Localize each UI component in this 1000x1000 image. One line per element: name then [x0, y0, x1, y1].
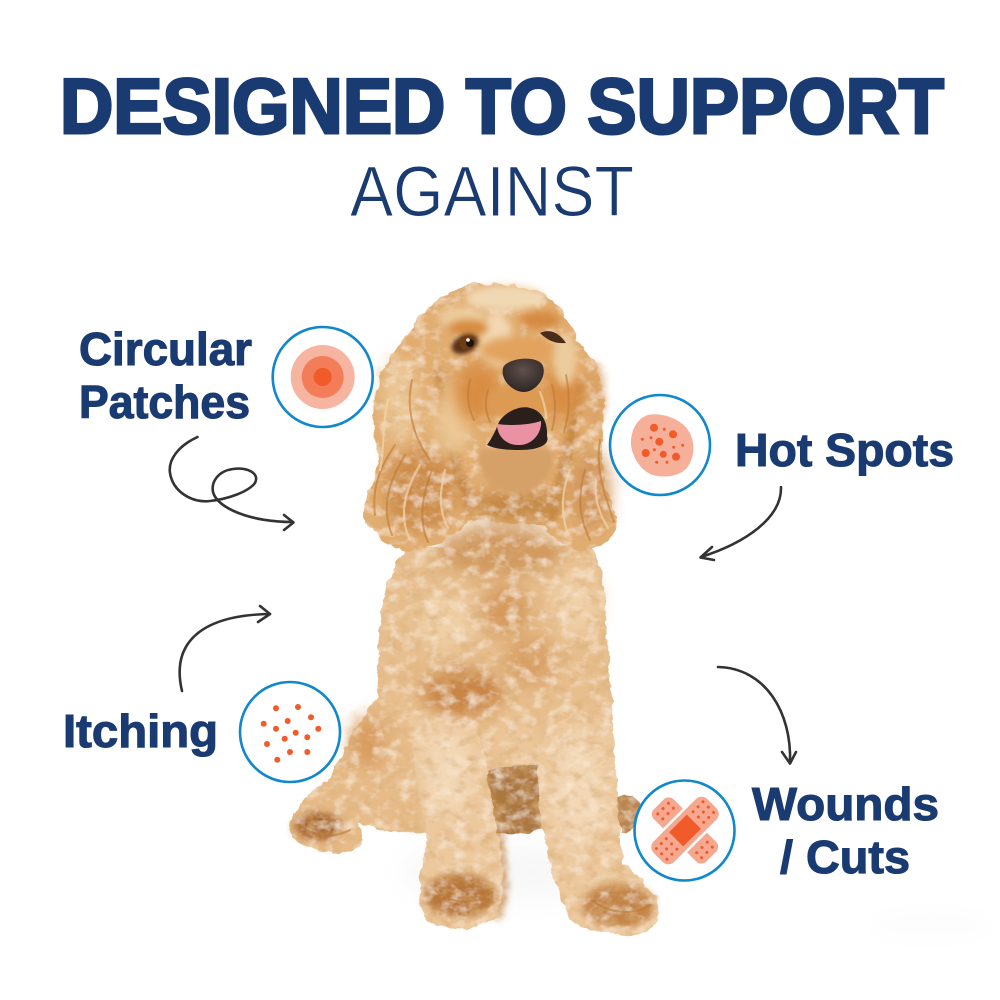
head and ears silhouette	[363, 283, 617, 551]
face strands	[468, 375, 569, 432]
right eye	[540, 331, 566, 343]
hind leg and left paw	[290, 695, 440, 852]
title	[60, 62, 944, 232]
label: circular patches: Circular	[79, 323, 252, 375]
neck shadow	[467, 489, 563, 521]
back right paw	[612, 795, 640, 834]
chin	[478, 447, 553, 494]
face shading	[434, 285, 582, 456]
leg curls	[300, 745, 650, 912]
ear and face boundary	[440, 370, 472, 510]
dog fur body	[290, 283, 660, 936]
right front leg	[537, 712, 660, 936]
title: AGAINST	[350, 153, 634, 232]
ear strands	[374, 380, 614, 542]
label: circular patches: Patches	[79, 376, 250, 428]
arrow: circular patches	[170, 437, 294, 530]
title: DESIGNED TO SUPPORT	[60, 62, 944, 150]
nose	[503, 359, 544, 392]
left front leg	[407, 707, 502, 928]
dark gap between legs	[484, 765, 546, 834]
icon: hot spots	[610, 395, 710, 495]
left eye	[449, 330, 481, 358]
torso	[377, 545, 617, 832]
chest shading	[422, 668, 502, 716]
left front leg shadow	[470, 735, 502, 917]
mouth	[487, 407, 548, 450]
arrow: hot spots	[700, 487, 781, 560]
back bandage	[649, 794, 721, 867]
ear shading	[384, 448, 456, 532]
tongue	[497, 421, 541, 445]
icon: itching	[240, 682, 340, 782]
front bandage	[645, 790, 725, 871]
icon: wounds and cuts	[634, 780, 734, 880]
label: hot spots: Hot Spots	[735, 424, 954, 476]
label: itching: Itching	[63, 705, 218, 757]
illustration: dog	[290, 283, 660, 936]
arrow: wounds	[718, 667, 796, 764]
label: wounds and cuts: Wounds	[752, 778, 939, 830]
floor shadow	[400, 846, 990, 939]
paw shading	[424, 873, 496, 917]
icon: circular patches	[273, 327, 373, 427]
arrow: itching	[180, 606, 270, 691]
label: wounds and cuts: / Cuts	[780, 831, 910, 883]
